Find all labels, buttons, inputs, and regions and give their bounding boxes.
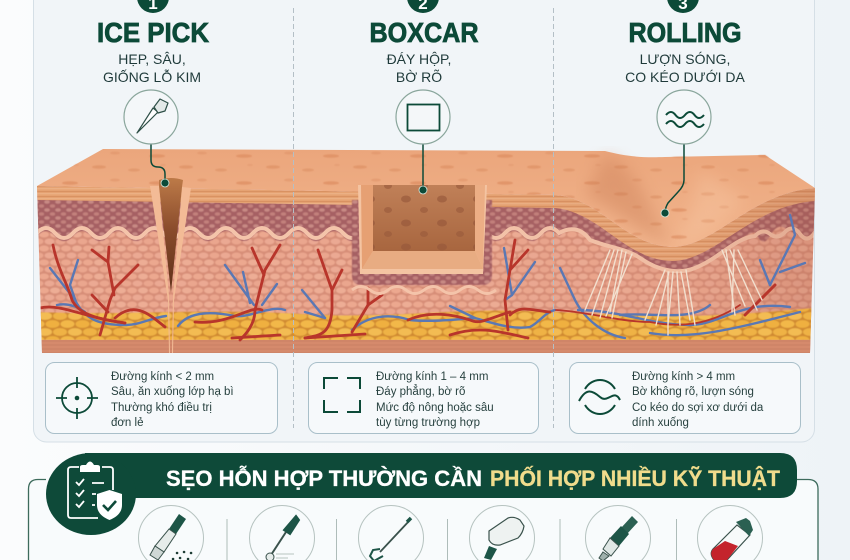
column: boxcar heading [370,0,478,85]
layer: base [37,340,815,353]
layer: dermal wave line [37,228,815,271]
text: boxcar details: Đường kính 1 – 4 mm [376,371,488,383]
text: rolling details: Bờ không rõ, lượn sóng [632,386,754,398]
boxcar scar cut [352,185,496,294]
layer: dermis [37,186,815,353]
skin cross-section illustration [37,144,815,353]
text: rolling details: Co kéo do sợi xơ dưới da [632,402,764,414]
icon: clipboard with shield [46,453,136,535]
icon: needle [124,90,178,144]
icon: wave in arcs [579,380,620,414]
blue vessels [50,215,805,338]
layer: fat [37,308,815,340]
subtitle: rolling: LƯỢN SÓNG, [640,51,730,67]
title: ice pick: ICE PICK [97,17,209,48]
leader line: ice pick [151,144,169,187]
icon: brackets [324,378,360,412]
column: ice pick heading [97,0,209,85]
heading banner [85,453,797,498]
skin front layers [37,186,815,353]
icon: target [56,377,98,419]
text: boxcar details: Mức độ nông hoặc sâu [376,402,494,414]
text: ice pick details: Đường kính < 2 mm [111,371,214,383]
icon: laser head [470,506,534,560]
leader line: boxcar [419,144,427,194]
heading text: PHỐI HỢP NHIỀU KỸ THUẬT [490,465,781,491]
card: boxcar details [308,362,538,434]
title: boxcar: BOXCAR [370,17,478,48]
icon: PRP blood tube [698,506,762,560]
text: boxcar details: Đáy phẳng, bờ rõ [376,385,465,398]
icon: square [396,90,450,144]
red vessels [40,240,775,340]
text: rolling details: Đường kính > 4 mm [632,371,735,383]
subtitle: rolling: CO KÉO DƯỚI DA [625,69,745,85]
text: ice pick details: Sâu, ăn xuống lớp hạ bì [111,386,234,398]
icon: device with particles [138,506,204,560]
text: rolling details: dính xuống [632,417,689,429]
heading text: SẸO HỖN HỢP THƯỜNG CẦN [166,465,482,491]
panel: scar types [34,0,814,442]
column: rolling heading [625,0,745,85]
icon: punch tool [358,506,424,560]
panel: combined techniques [28,480,818,560]
ice pick scar cut [150,178,191,353]
icon: nozzle device [586,506,650,560]
layer: epidermis [37,186,815,261]
text: boxcar details: tùy từng trường hợp [376,417,480,429]
icon: waves [657,90,711,144]
skin top surface [37,149,815,247]
subtitle: boxcar: BỜ RÕ [396,69,442,85]
leader line: rolling [661,144,684,217]
card: ice pick details [46,362,278,434]
subtitle: boxcar: ĐÁY HỘP, [387,51,451,67]
card: rolling details [570,362,800,434]
white fibrous bands [585,250,762,335]
text: ice pick details: Thường khó điều trị [111,402,212,414]
subtitle: ice pick: GIỐNG LỖ KIM [103,68,201,85]
layer: papillary dermis [37,196,815,271]
subtitle: ice pick: HẸP, SÂU, [118,51,186,67]
icon: subcision tool [250,506,314,560]
shading over right side [691,188,815,340]
title: rolling: ROLLING [628,17,742,48]
text: ice pick details: đơn lẻ [111,417,143,429]
